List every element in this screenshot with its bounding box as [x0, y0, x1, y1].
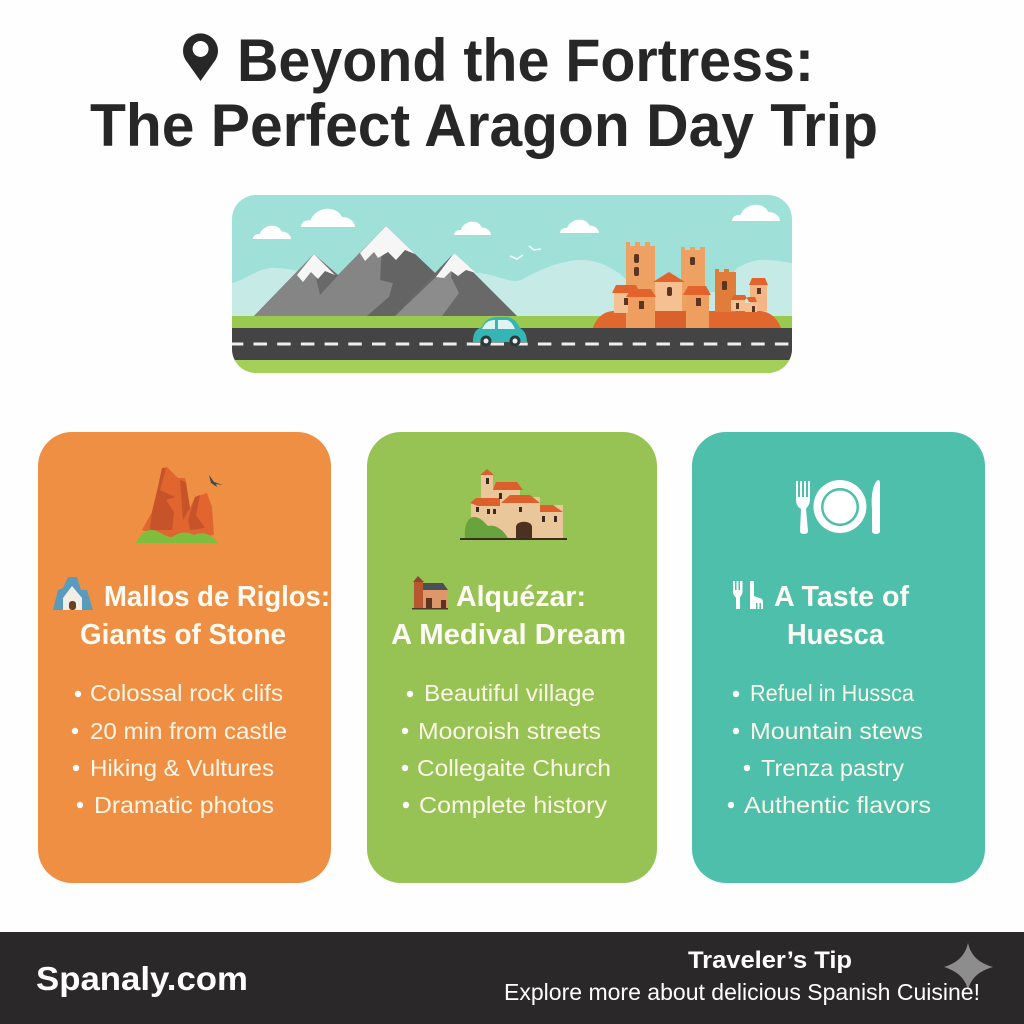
heading: Alquézar: [456, 581, 586, 613]
icon: sparkle star [944, 943, 993, 990]
brand name: Spanaly.com [36, 960, 248, 997]
bullet list: Beautiful village [424, 680, 595, 706]
traveler's tip: Explore more about delicious Spanish Cuisine! [504, 979, 980, 1005]
footer bar [0, 932, 1024, 1024]
panel: Alquezar [367, 432, 657, 883]
panel: Taste of Huesca [692, 432, 985, 883]
clouds [253, 205, 780, 239]
bullet list: Dramatic photos [94, 792, 274, 818]
icon: small cutlery [733, 581, 763, 609]
heading: A Taste of [774, 581, 909, 613]
grass and road [232, 316, 792, 328]
panel: Mallos de Riglos [38, 432, 331, 883]
heading [80, 581, 330, 651]
icon: rock towers and bird [136, 467, 223, 543]
birds [510, 246, 541, 259]
heading: Giants of Stone [80, 619, 286, 651]
icon: small cave [53, 577, 93, 610]
heading [391, 581, 626, 651]
bullet list: Complete history [419, 792, 608, 818]
mountains [254, 226, 517, 316]
heading: Huesca [787, 619, 885, 651]
icon: hill village [460, 469, 567, 540]
bullet list [728, 680, 931, 818]
bullet list: Colossal rock clifs [90, 680, 283, 706]
bullet list: Hiking & Vultures [90, 755, 274, 781]
bullet list [402, 680, 611, 818]
heading [774, 581, 909, 651]
bullet list: Trenza pastry [761, 755, 904, 781]
heading: Mallos de Riglos: [104, 581, 330, 613]
bullet list: Mountain stews [750, 718, 923, 744]
icon: small house [412, 576, 448, 610]
castle [593, 242, 781, 328]
bullet list [72, 680, 287, 818]
banner illustration: road trip scene [230, 195, 792, 374]
icon: plate fork knife [796, 480, 880, 534]
icon: map pin [183, 33, 218, 81]
bullet list: Refuel in Hussca [750, 680, 914, 706]
bullet list: Authentic flavors [744, 792, 931, 818]
car [473, 317, 527, 346]
traveler's tip: Traveler’s Tip [688, 947, 852, 974]
title: Beyond the Fortress: [237, 27, 814, 94]
title [90, 27, 878, 159]
heading: A Medival Dream [391, 619, 626, 651]
title: The Perfect Aragon Day Trip [90, 92, 878, 159]
bullet list: Collegaite Church [417, 755, 611, 781]
traveler's tip [504, 947, 980, 1005]
bullet list: Mooroish streets [418, 718, 601, 744]
bullet list: 20 min from castle [90, 718, 287, 744]
